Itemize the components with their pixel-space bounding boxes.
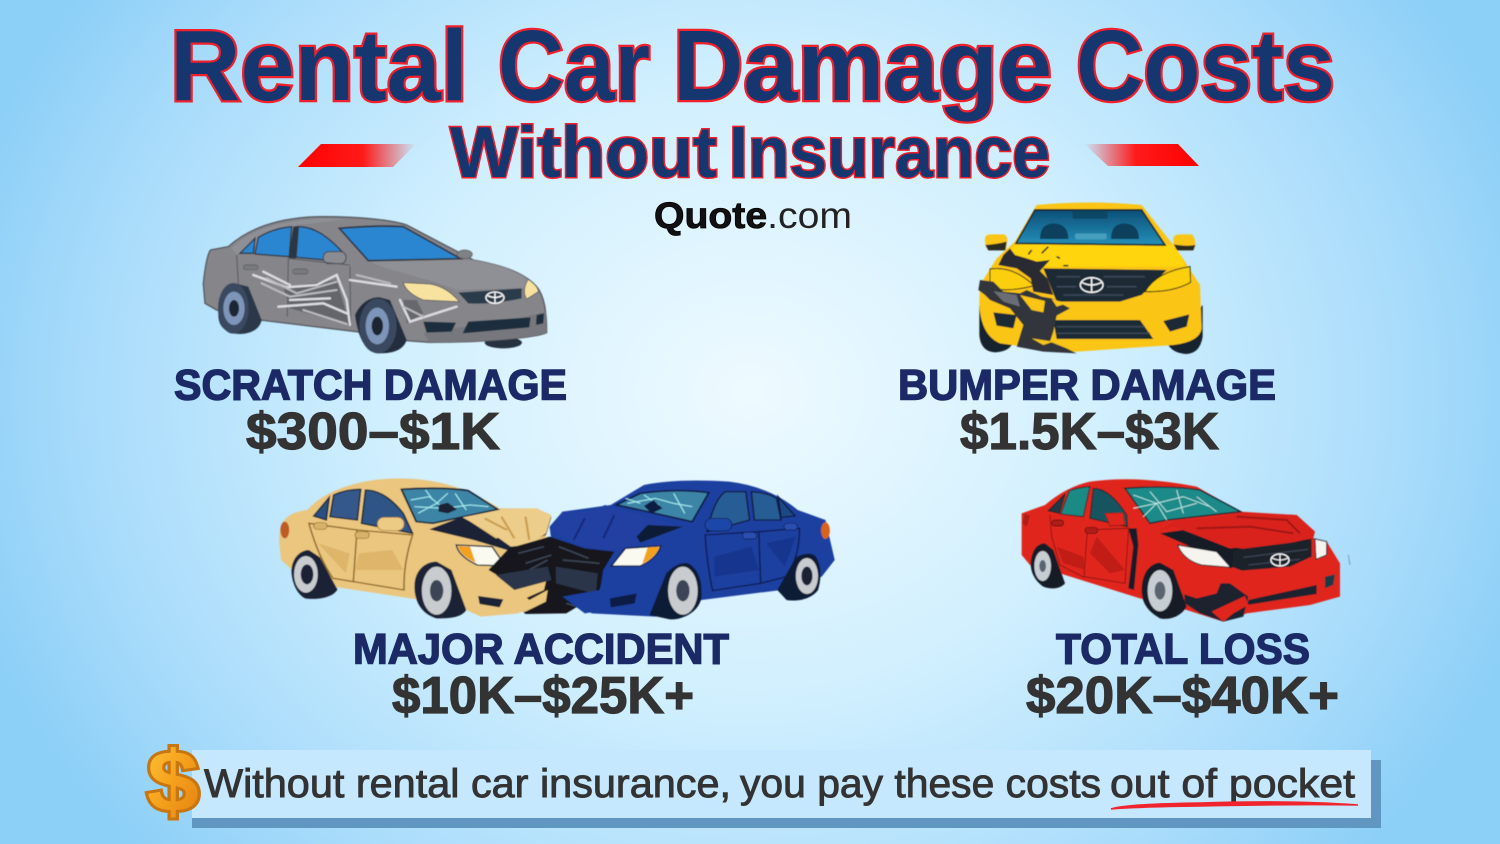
title: Costs (1076, 10, 1335, 122)
toyota logo (1080, 278, 1103, 292)
price: major accident: $10K–$25K+ (392, 667, 694, 725)
footer callout bar (192, 750, 1381, 828)
footer text: you pay these costs (740, 762, 1101, 806)
brand logo: Quote.com: Quote.com (654, 195, 852, 236)
footer text: out of pocket (1110, 762, 1355, 806)
grille (1043, 268, 1167, 302)
price: scratch damage: $300–$1K (246, 403, 500, 461)
footer text: Without rental car insurance, (204, 762, 731, 806)
title: Car (498, 10, 650, 122)
crumpled damage (978, 280, 1077, 353)
block: bumper damage (898, 362, 1276, 461)
left red accent bar (298, 144, 416, 167)
price: total loss: $20K–$40K+ (1026, 667, 1339, 725)
tan sedan (279, 478, 551, 617)
block: scratch damage (174, 362, 567, 461)
block: major accident (353, 626, 729, 725)
scratch marks (253, 272, 457, 325)
icon: gold dollar sign: $ (147, 734, 199, 830)
right red accent bar (1084, 144, 1199, 166)
title (170, 10, 1335, 122)
label: major accident: MAJOR ACCIDENT (353, 626, 729, 674)
wheels (1031, 543, 1065, 588)
headlights and grille (403, 283, 459, 302)
blue sedan (550, 481, 835, 617)
bumper debris (1183, 583, 1248, 622)
subtitle: Without (450, 113, 717, 193)
car: bumper damage (yellow front view) (978, 202, 1203, 354)
car: scratch damage (grey sedan) (203, 217, 547, 353)
price: bumper damage: $1.5K–$3K (960, 403, 1219, 461)
footer text (204, 762, 1355, 806)
label: bumper damage: BUMPER DAMAGE (898, 362, 1276, 410)
block: total loss (1026, 626, 1339, 725)
title: Damage (673, 10, 1052, 122)
car: major accident (tan and blue head-on) (279, 478, 835, 619)
car: total loss (red wreck) (1022, 479, 1350, 622)
subtitle: Insurance (729, 113, 1050, 193)
wheels (291, 550, 337, 599)
red underline (1111, 802, 1358, 809)
title: Rental (170, 10, 468, 122)
label: total loss: TOTAL LOSS (1056, 626, 1310, 674)
subtitle (450, 113, 1050, 193)
crumpled hood (1160, 530, 1315, 568)
label: scratch damage: SCRATCH DAMAGE (174, 362, 567, 410)
crumpled engine (488, 537, 614, 614)
